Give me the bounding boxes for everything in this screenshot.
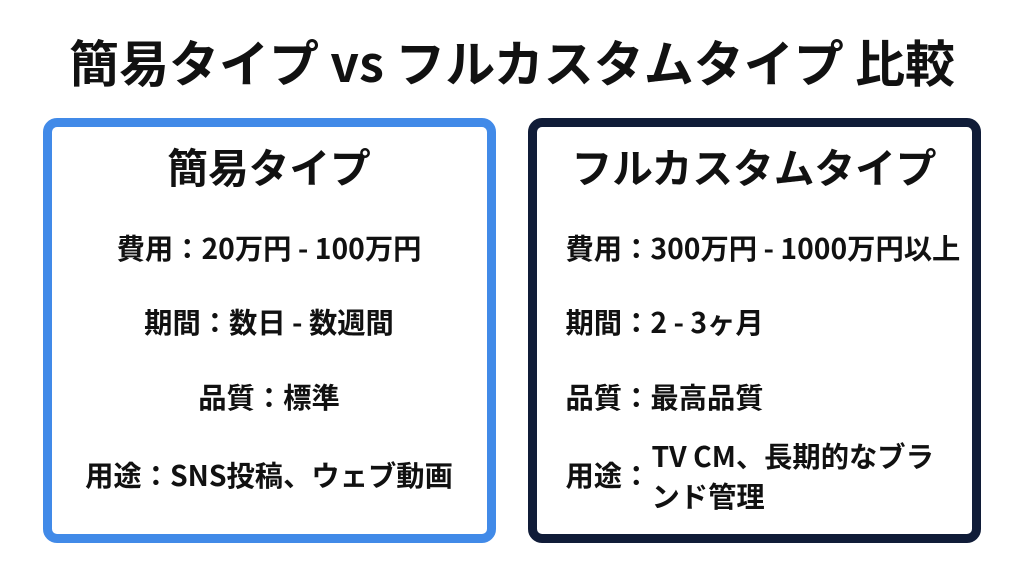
use text	[652, 435, 934, 516]
use: 用途：	[566, 454, 650, 495]
cost: 費用：20万円 - 100万円	[117, 227, 421, 268]
heading: simple type: 簡易タイプ	[167, 136, 371, 195]
duration: 期間：2 - 3ヶ月	[566, 301, 764, 342]
panel: simple type	[43, 118, 496, 543]
quality: 品質：最高品質	[566, 376, 764, 417]
cost: 費用：300万円 - 1000万円以上	[566, 227, 960, 268]
panel: full custom type	[528, 118, 981, 543]
use: 用途：SNS投稿、ウェブ動画	[85, 454, 453, 495]
title: 簡易タイプ vs フルカスタムタイプ 比較	[69, 25, 955, 97]
use text: TV CM、長期的なブラ	[652, 435, 934, 476]
duration: 期間：数日 - 数週間	[144, 301, 394, 342]
quality: 品質：標準	[198, 376, 340, 417]
heading: full custom type: フルカスタムタイプ	[572, 136, 936, 195]
use text: ンド管理	[652, 475, 765, 516]
